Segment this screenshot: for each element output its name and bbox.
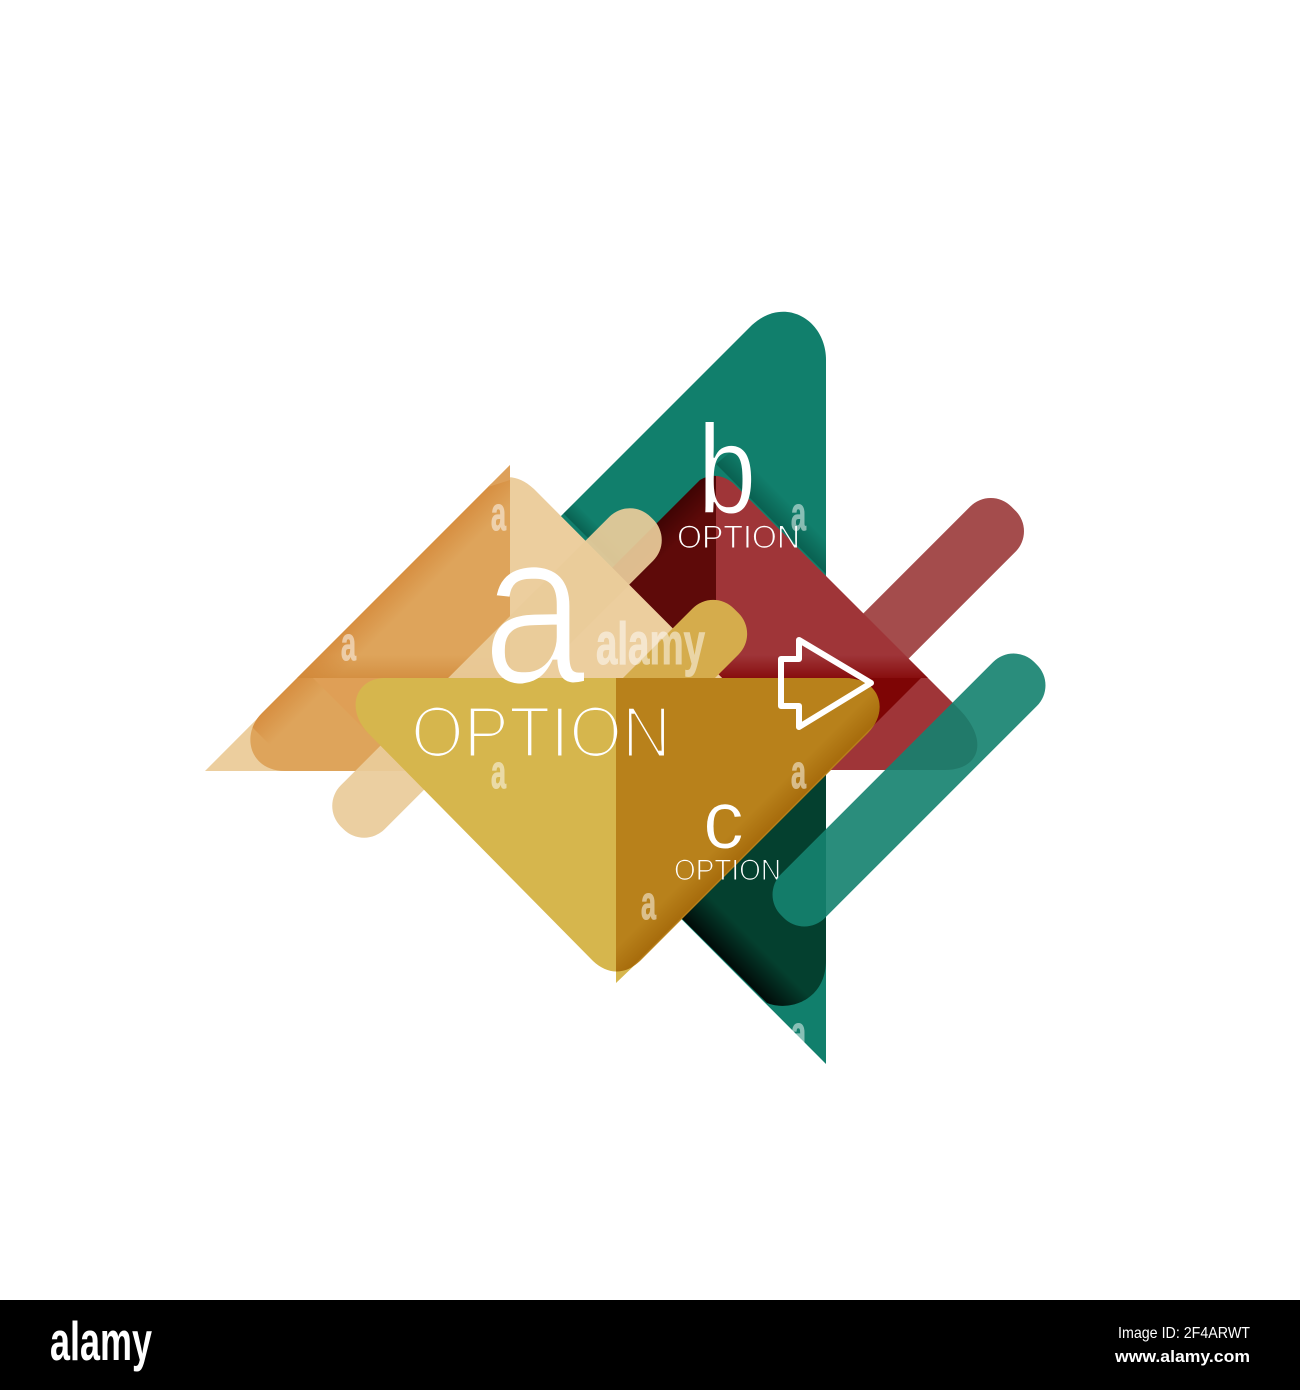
- footer url: www.alamy.com: [1114, 1347, 1250, 1366]
- panel: gold triangle: [356, 678, 880, 972]
- panel: green triangle: [561, 312, 826, 1064]
- icon: arrow outline: [781, 640, 871, 727]
- watermark: a: [491, 745, 506, 798]
- watermark: a: [491, 487, 506, 540]
- watermark: [341, 487, 806, 1059]
- footer logo: alamy: [50, 1310, 152, 1372]
- watermark: a: [641, 876, 656, 929]
- label: OPTION a: OPTION: [411, 693, 671, 773]
- label: letter c: c: [703, 773, 744, 866]
- label: big letter a: a: [482, 487, 587, 730]
- panel: gold triangle corners: [313, 678, 921, 983]
- watermark: a: [791, 487, 806, 540]
- orange apex tip: [488, 465, 510, 487]
- watermark: alamy: [596, 611, 705, 677]
- orange sharp triangle: [205, 465, 510, 771]
- footer bar: [0, 1300, 1300, 1390]
- label: OPTION c: OPTION: [674, 854, 781, 887]
- tan stick: [320, 496, 674, 850]
- watermark: a: [791, 1006, 806, 1059]
- gold stick: [591, 588, 759, 756]
- footer image id: Image ID: 2F4ARWT: [1118, 1325, 1250, 1342]
- label: letter b: b: [698, 398, 756, 540]
- label: OPTION b: OPTION: [677, 519, 800, 555]
- watermark: a: [341, 617, 356, 670]
- panel: tan triangle: [250, 477, 722, 771]
- red stick: [838, 486, 1036, 684]
- panel: red triangle: [612, 476, 978, 770]
- watermark: a: [791, 745, 806, 798]
- green stick: [761, 642, 1057, 938]
